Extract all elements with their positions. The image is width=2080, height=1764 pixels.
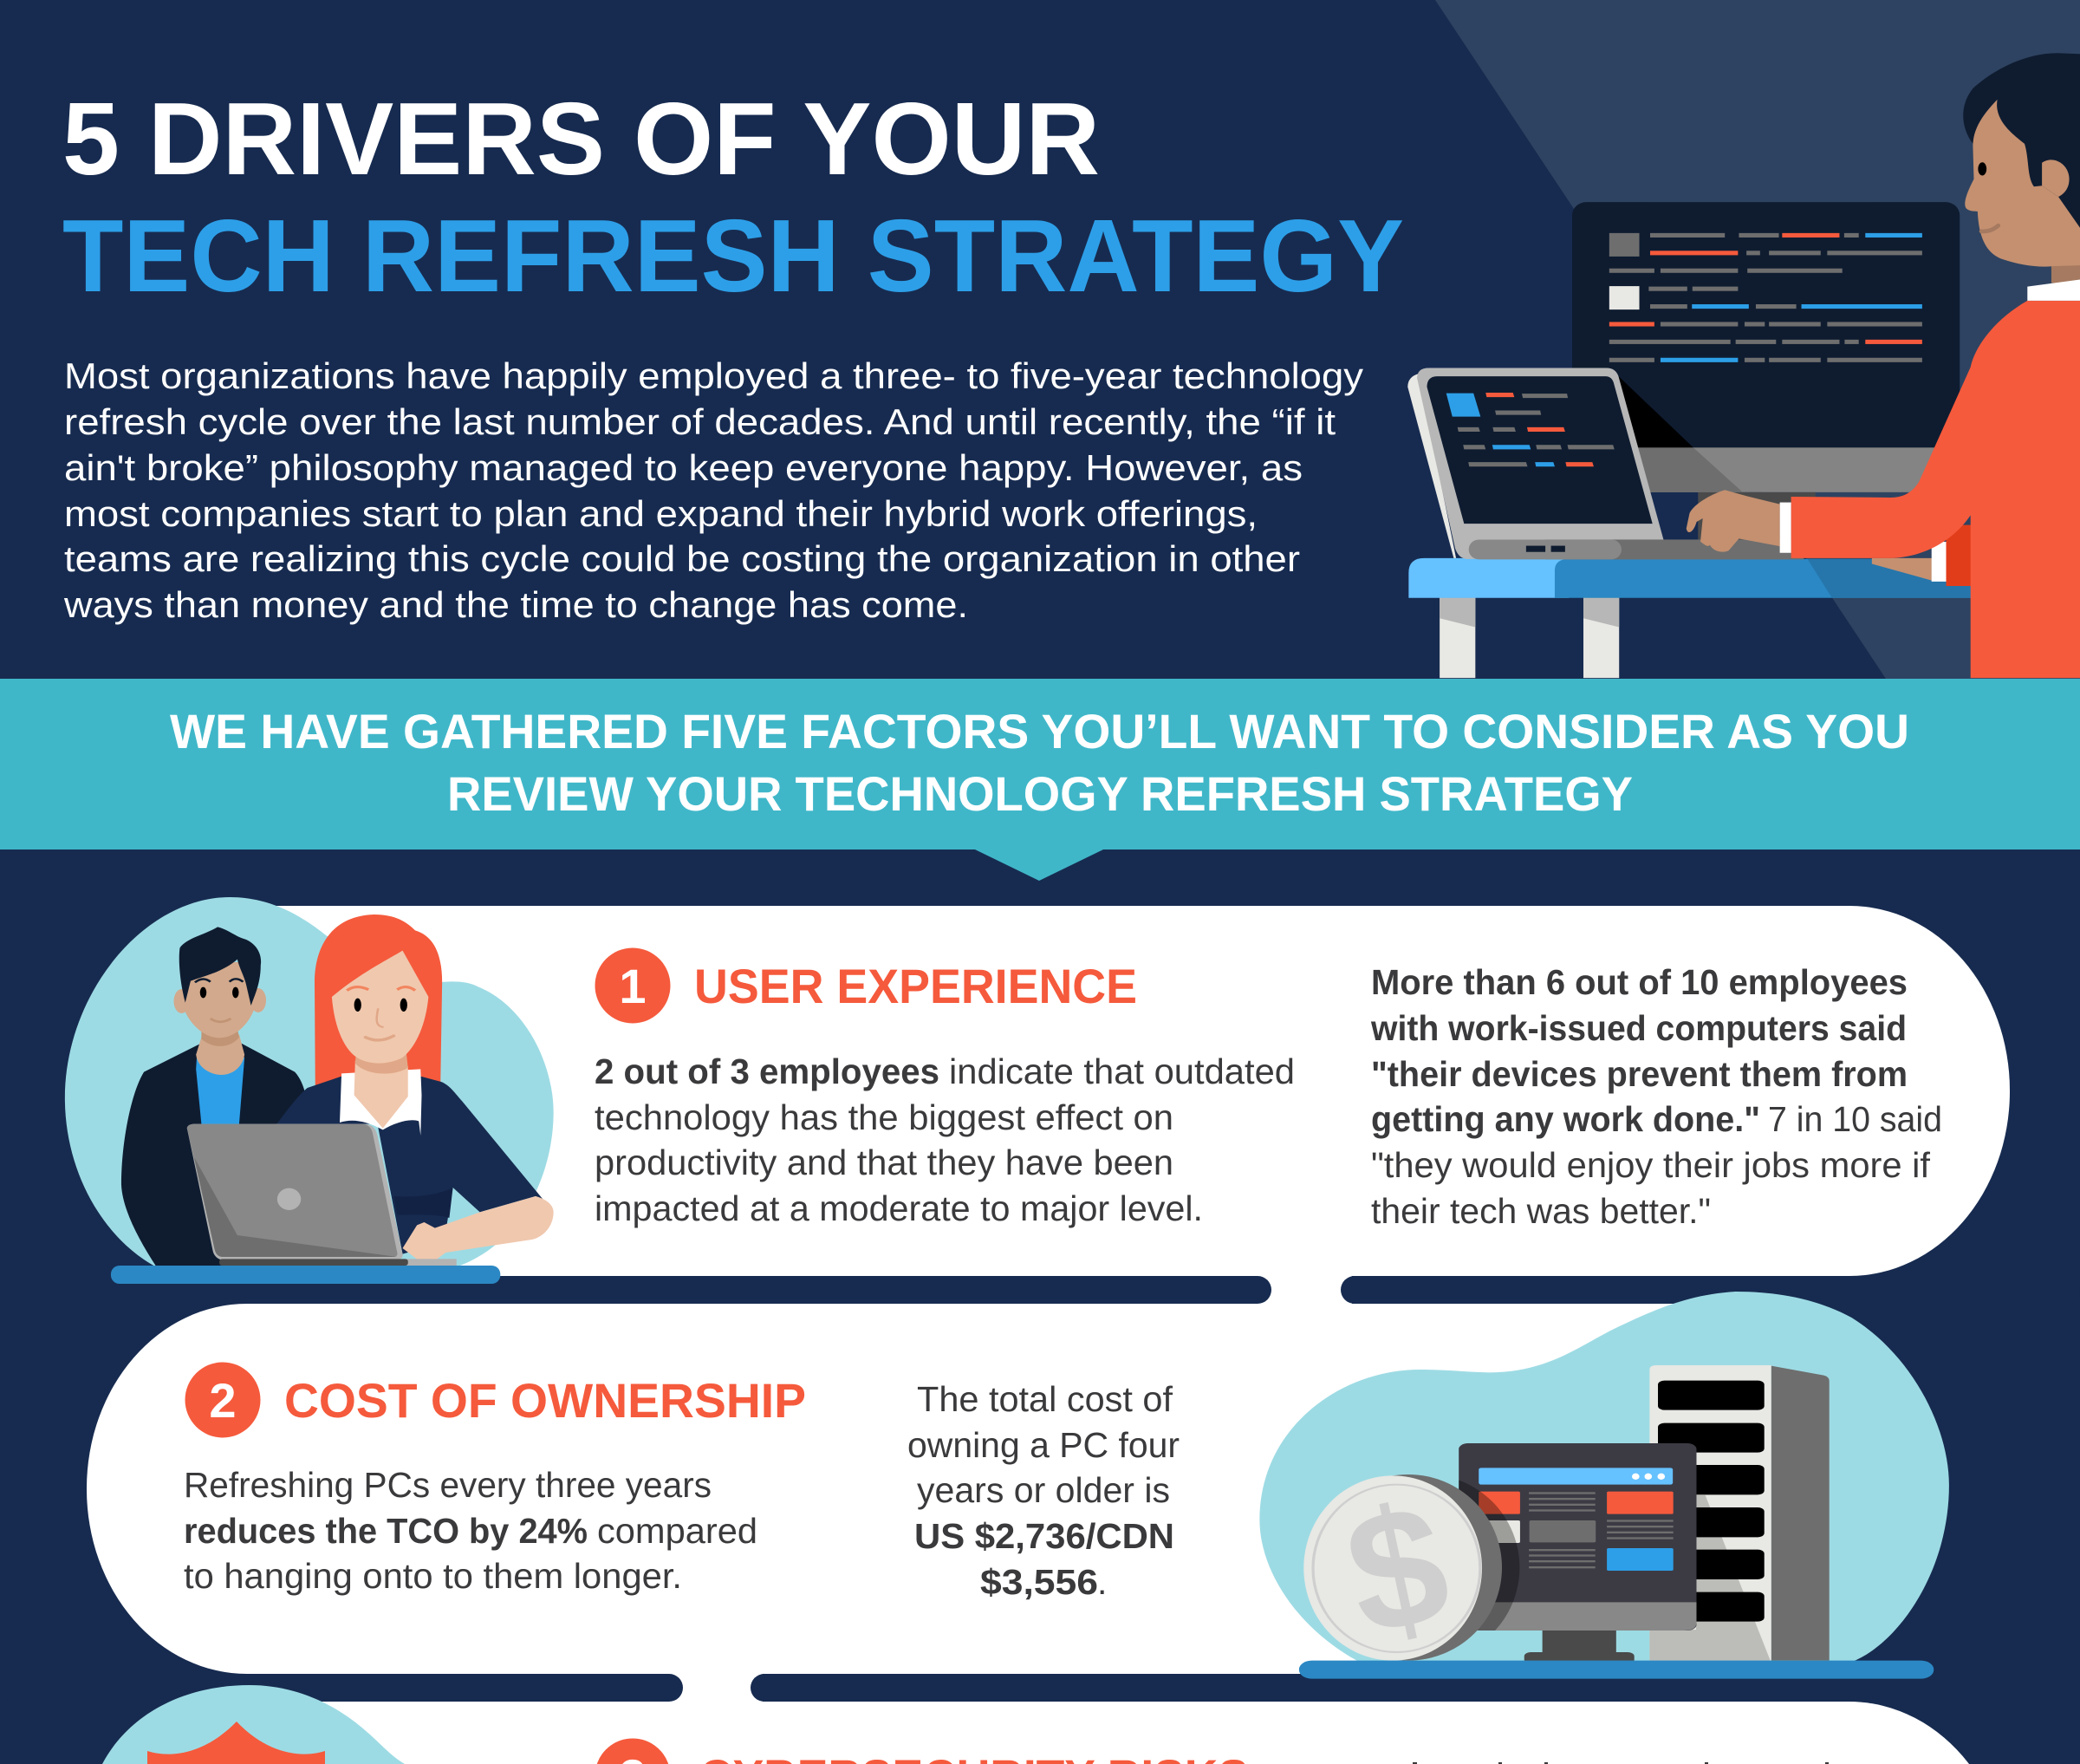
intro paragraph: most companies start to plan and expand their hybrid work offerings, xyxy=(64,493,1258,534)
man figure xyxy=(121,927,306,1267)
icon: laptop xyxy=(1407,368,1804,559)
text block: work-issued computers: getting any work done." xyxy=(1371,1099,1760,1139)
intro paragraph: Most organizations have happily employed a three- to five-year technology xyxy=(64,355,1363,396)
woman figure xyxy=(276,915,554,1260)
text block: total cost: US $2,736/CDN xyxy=(914,1516,1174,1556)
title: TECH REFRESH STRATEGY xyxy=(62,199,1404,314)
text block: total cost xyxy=(907,1379,1180,1602)
title xyxy=(62,81,1404,314)
icon: desktop computer xyxy=(1459,1443,1696,1663)
text block: employees statistic: technology has the biggest effect on xyxy=(595,1097,1173,1137)
text block: total cost: . xyxy=(1097,1562,1107,1602)
banner: five factors: WE HAVE GATHERED FIVE FACTORS YOU’LL WANT TO CONSIDER AS YOU xyxy=(170,704,1909,758)
text block: total cost: years or older is xyxy=(917,1470,1170,1510)
text block: employees statistic xyxy=(595,1051,1295,1228)
text block: work-issued computers: "their devices prevent them from xyxy=(1371,1054,1908,1094)
text block: refreshing PCs: compared xyxy=(597,1511,757,1551)
text block: work-issued computers: with work-issued computers said xyxy=(1370,1008,1907,1048)
icon: desk xyxy=(1408,558,1973,678)
illustration: coin, computer and server tower xyxy=(1259,1292,1949,1679)
shield blob illustration xyxy=(102,1685,405,1764)
text block: total cost: $3,556 xyxy=(980,1562,1098,1602)
text block: work-issued computers: 7 in 10 said xyxy=(1768,1099,1942,1139)
text block: work-issued computers xyxy=(1370,962,1942,1231)
text block: work-issued computers: "they would enjoy their jobs more if xyxy=(1371,1145,1931,1185)
intro paragraph xyxy=(63,355,1363,625)
illustration: two employees with laptop xyxy=(65,897,554,1284)
icon: coin xyxy=(1303,1474,1519,1661)
text block: work-issued computers: More than 6 out of 10 employees xyxy=(1371,962,1908,1002)
panel: cybersecurity risks (cropped) xyxy=(102,1685,1829,1764)
title: 5 DRIVERS OF YOUR xyxy=(62,81,1100,197)
icon: closed laptop back xyxy=(187,1124,457,1266)
icon: man at keyboard xyxy=(1687,53,2080,678)
number badge 2 xyxy=(185,1363,260,1437)
banner: five factors xyxy=(0,679,2080,881)
text block: refreshing PCs: Refreshing PCs every three years xyxy=(184,1465,712,1505)
number badge 1 xyxy=(595,948,671,1023)
intro paragraph: ways than money and the time to change has come. xyxy=(63,584,968,625)
number badge 1: 1 xyxy=(619,959,647,1013)
panel: cost of ownership xyxy=(184,1363,1180,1602)
number badge 2: 2 xyxy=(209,1373,237,1428)
number badge 3 xyxy=(597,1738,668,1764)
heading: cost of ownership: COST OF OWNERSHIP xyxy=(284,1373,806,1428)
intro paragraph: ain't broke” philosophy managed to keep everyone happy. However, as xyxy=(64,447,1303,488)
text block: refreshing PCs: reduces the TCO by 24% xyxy=(184,1511,588,1551)
text block: total cost: The total cost of xyxy=(917,1379,1173,1419)
panel: user experience xyxy=(595,948,1942,1231)
intro paragraph: teams are realizing this cycle could be costing the organization in other xyxy=(64,538,1300,579)
heading: user experience: USER EXPERIENCE xyxy=(694,959,1137,1013)
text block: employees statistic: productivity and that they have been xyxy=(595,1142,1173,1182)
text block: refreshing PCs: to hanging onto to them longer. xyxy=(184,1556,682,1596)
text block: employees statistic: impacted at a moderate to major level. xyxy=(595,1188,1203,1228)
icon: server tower xyxy=(1649,1365,1830,1661)
icon: desktop monitor xyxy=(1572,202,1960,545)
text block: work-issued computers: their tech was better." xyxy=(1371,1191,1711,1231)
text block: employees statistic: 2 out of 3 employees xyxy=(595,1051,939,1091)
text block: total cost: owning a PC four xyxy=(907,1425,1180,1465)
serpentine white path xyxy=(0,906,2080,1764)
intro paragraph: refresh cycle over the last number of decades. And until recently, the “if it xyxy=(64,401,1336,442)
text block: employees statistic: indicate that outdated xyxy=(949,1051,1295,1091)
banner: five factors: REVIEW YOUR TECHNOLOGY REFRESH STRATEGY xyxy=(447,766,1633,821)
text block: refreshing PCs xyxy=(184,1465,757,1596)
illustration: man at desk with monitor and laptop xyxy=(1407,53,2080,678)
dollar symbol: $ xyxy=(1331,1467,1463,1672)
